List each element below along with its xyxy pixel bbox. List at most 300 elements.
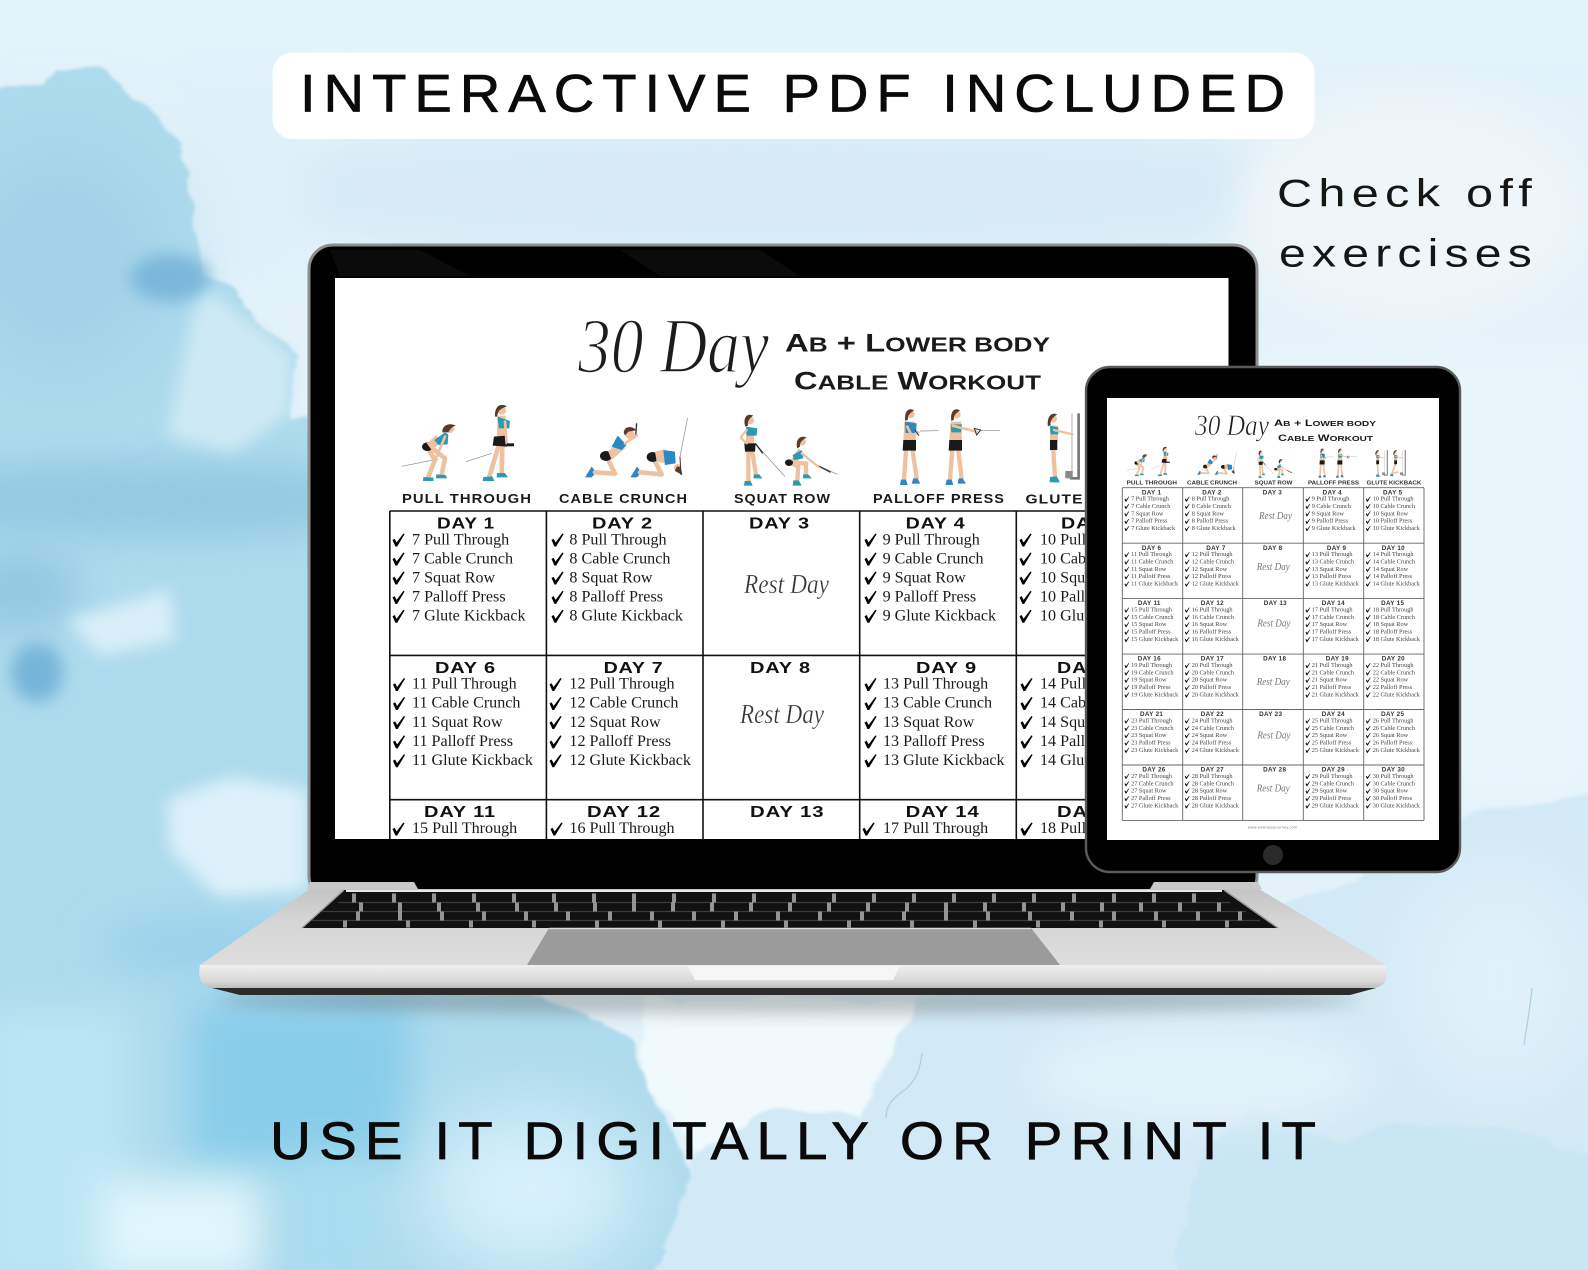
heading pill: interactive PDF included: INTERACTIVE PDF INCLUDED [300, 64, 1293, 124]
tablet day 20: 22 Glute Kickback [1373, 691, 1421, 698]
tablet day 26: 27 Pull Through [1131, 773, 1173, 780]
tablet day 12: 16 Squat Row [1192, 621, 1228, 628]
tablet day 10 [1366, 545, 1421, 588]
tablet day 25: 26 Glute Kickback [1373, 747, 1421, 754]
tablet day 20: 22 Pull Through [1373, 662, 1414, 669]
tablet day 12: 16 Pull Through [1192, 607, 1233, 614]
tablet day 10: 14 Pull Through [1373, 551, 1414, 558]
tablet day 13 rest: DAY 13 [1264, 600, 1287, 607]
tablet day 25 [1366, 711, 1421, 754]
tablet day 5: 10 Palloff Press [1373, 518, 1413, 525]
tablet day 30: 30 Squat Row [1373, 788, 1409, 795]
tablet day 30: 30 Palloff Press [1373, 795, 1413, 802]
tablet day 7: 12 Pull Through [1192, 551, 1233, 558]
tablet day 10: 14 Palloff Press [1373, 573, 1413, 580]
tablet day 2: 8 Glute Kickback [1192, 525, 1237, 532]
tablet day 1: 7 Pull Through [1131, 496, 1170, 503]
tablet day 9: 13 Cable Crunch [1312, 559, 1355, 566]
tablet day 27: 28 Cable Crunch [1192, 780, 1235, 787]
tablet day 17 [1185, 656, 1240, 698]
day 6: 11 Cable Crunch [412, 695, 520, 712]
tablet day 6: 11 Cable Crunch [1131, 559, 1174, 566]
tablet day 11: 15 Palloff Press [1131, 629, 1171, 636]
tablet day 11: 15 Glute Kickback [1131, 636, 1179, 643]
day 5: DAY 5 [1061, 516, 1121, 532]
tablet day 22: DAY 22 [1201, 711, 1224, 718]
tablet day 9: DAY 9 [1327, 545, 1346, 552]
day 4: 9 Glute Kickback [883, 608, 997, 625]
tablet day 17: DAY 17 [1201, 656, 1224, 663]
tablet day 22: 24 Pull Through [1192, 718, 1233, 724]
tablet day 27: 28 Palloff Press [1192, 795, 1232, 802]
tablet day 5: 10 Cable Crunch [1373, 503, 1416, 510]
tablet day 8 rest [1256, 545, 1290, 573]
tablet day 14: 17 Pull Through [1312, 607, 1353, 614]
tablet day 16 [1124, 656, 1179, 698]
tablet day 4: 9 Pull Through [1312, 496, 1350, 503]
day 5: 10 Squat Row [1040, 569, 1132, 586]
tablet day 25: 26 Pull Through [1373, 718, 1414, 724]
day 1: 7 Palloff Press [412, 589, 506, 606]
keyboard [302, 890, 1278, 928]
tablet day 25: 26 Palloff Press [1373, 740, 1413, 746]
day 4: 9 Palloff Press [883, 589, 976, 606]
tablet day 7: 12 Squat Row [1192, 566, 1228, 573]
day 2 [552, 516, 684, 625]
tablet body [1086, 367, 1460, 872]
day 6: 11 Glute Kickback [412, 752, 534, 769]
tablet day 10: 14 Squat Row [1373, 566, 1409, 573]
tablet day 14: 17 Glute Kickback [1312, 636, 1360, 643]
laptop mockup [199, 245, 1387, 995]
day 13: DAY 13 [750, 804, 824, 821]
tablet day 22 [1185, 711, 1240, 754]
tablet day 21: 23 Glute Kickback [1131, 747, 1179, 754]
tablet day 30: 30 Cable Crunch [1373, 780, 1416, 787]
tablet day 4 [1305, 489, 1357, 532]
tablet day 10: 14 Glute Kickback [1373, 581, 1421, 588]
day 15 [1020, 806, 1085, 836]
tablet day 19: 21 Pull Through [1312, 662, 1353, 669]
tablet day 21: 23 Pull Through [1131, 718, 1173, 724]
tablet day 6: 11 Palloff Press [1131, 573, 1171, 580]
tablet day 16: DAY 16 [1138, 656, 1161, 663]
tablet day 18 rest: DAY 18 [1263, 656, 1286, 663]
tablet day 15: 18 Palloff Press [1373, 629, 1413, 636]
day 12: DAY 12 [587, 804, 661, 821]
tablet day 1 [1124, 489, 1176, 532]
day 12: 16 Pull Through [569, 820, 675, 837]
tablet day 28 rest: DAY 28 [1263, 767, 1286, 774]
day 4: DAY 4 [906, 516, 966, 532]
tablet day 30: DAY 30 [1382, 767, 1405, 774]
tablet day 11: 15 Pull Through [1131, 607, 1173, 614]
tablet day 22: 24 Squat Row [1192, 732, 1228, 739]
figure: pull through [402, 405, 514, 481]
tablet day 15: 18 Pull Through [1373, 607, 1414, 614]
figure: squat row [741, 415, 837, 486]
tablet day 20: DAY 20 [1382, 656, 1405, 663]
day 2: 8 Palloff Press [569, 589, 663, 606]
day 10: DAY 10 [1057, 660, 1129, 677]
tablet day 8 rest: DAY 8 [1263, 545, 1283, 552]
day 4: 9 Pull Through [883, 531, 980, 548]
day 4 [864, 516, 997, 625]
tablet exercise figures [1127, 447, 1405, 478]
day 3 rest: Rest Day [743, 569, 829, 599]
tablet worksheet title: C ABLE W ORKOUT [1278, 433, 1373, 444]
day 8 rest: DAY 8 [750, 660, 811, 677]
tablet exercise labels: CABLE CRUNCH [1187, 480, 1237, 486]
tablet day 21: DAY 21 [1140, 711, 1163, 718]
tablet day 29: 29 Squat Row [1312, 788, 1348, 795]
day 3 rest: DAY 3 [749, 516, 810, 532]
tablet day 17: 20 Glute Kickback [1192, 691, 1240, 698]
laptop base [199, 882, 1387, 995]
tablet day 21: 23 Palloff Press [1131, 740, 1171, 746]
day 5 [1020, 518, 1085, 623]
day 4: 9 Squat Row [883, 569, 966, 586]
day 1: 7 Glute Kickback [412, 608, 526, 625]
tablet day 4: 9 Cable Crunch [1312, 503, 1352, 510]
day 6: 11 Squat Row [412, 714, 503, 731]
tablet day 16: 19 Glute Kickback [1131, 691, 1179, 698]
tablet day 19 [1305, 656, 1360, 698]
tablet day 1: DAY 1 [1142, 489, 1161, 496]
exercise labels: GLUTE KICKBACK [1026, 492, 1180, 506]
tablet footer url: www.wellnessjourney.com [1248, 826, 1297, 830]
day 1: 7 Pull Through [412, 531, 509, 548]
day 7: 12 Squat Row [569, 714, 661, 731]
tablet day 20: 22 Cable Crunch [1373, 669, 1416, 676]
tablet exercise labels: PULL THROUGH [1127, 480, 1177, 486]
tablet day 29: 29 Pull Through [1312, 773, 1353, 780]
tablet day 5 [1366, 489, 1421, 532]
tablet day 16: 19 Pull Through [1131, 662, 1173, 669]
tablet day 27: 28 Pull Through [1192, 773, 1233, 780]
tablet day 27: DAY 27 [1201, 767, 1224, 774]
tablet exercise labels: SQUAT ROW [1255, 480, 1293, 486]
tablet day 14: 17 Squat Row [1312, 621, 1348, 628]
tablet day 29: DAY 29 [1322, 767, 1345, 774]
tablet day 15: 18 Squat Row [1373, 621, 1409, 628]
tablet day 27 [1185, 767, 1240, 809]
tablet day 3 rest: DAY 3 [1263, 489, 1282, 496]
tablet day 4: 9 Palloff Press [1312, 518, 1349, 525]
tablet day 13 rest [1257, 600, 1290, 630]
tablet day 16: 19 Palloff Press [1131, 684, 1171, 691]
tablet day 10: DAY 10 [1382, 545, 1405, 552]
worksheet title [578, 320, 1050, 390]
day 15: DAY 15 [1057, 804, 1131, 821]
tablet day 25: 26 Cable Crunch [1373, 725, 1416, 732]
tablet day 16: 19 Squat Row [1131, 677, 1167, 684]
tablet day 5: 10 Squat Row [1373, 510, 1409, 517]
day 9: 13 Squat Row [883, 714, 975, 731]
tablet day 29: 29 Palloff Press [1312, 795, 1352, 802]
tablet day 2: DAY 2 [1202, 489, 1222, 496]
tablet day 11 [1124, 600, 1179, 643]
tablet day 27: 28 Squat Row [1192, 788, 1228, 795]
day 5: 10 Palloff Press [1040, 589, 1142, 606]
tablet day 22: 24 Glute Kickback [1192, 747, 1240, 754]
tablet day 30: 30 Glute Kickback [1373, 802, 1421, 809]
tablet day 6: 11 Squat Row [1131, 566, 1167, 573]
tablet day 12: 16 Glute Kickback [1192, 636, 1240, 643]
day 10: 14 Cable Crunch [1040, 695, 1149, 712]
day 9: 13 Pull Through [883, 676, 988, 693]
tablet exercise labels: GLUTE KICKBACK [1367, 480, 1421, 486]
tablet day 2: 8 Cable Crunch [1192, 503, 1232, 510]
tablet day 14: 17 Cable Crunch [1312, 614, 1355, 621]
worksheet title: 30 Day [577, 302, 769, 389]
day 1 [392, 516, 526, 625]
tablet day 22: 24 Cable Crunch [1192, 725, 1235, 732]
day 6: 11 Palloff Press [412, 733, 513, 750]
day 6: DAY 6 [435, 660, 496, 677]
tablet day 23 rest: DAY 23 [1259, 711, 1282, 718]
day 10: 14 Palloff Press [1040, 733, 1142, 750]
day 10: 14 Glute Kickback [1040, 752, 1163, 769]
tablet day 15: DAY 15 [1381, 600, 1404, 607]
tablet day 26: 27 Glute Kickback [1131, 802, 1179, 809]
day 3 rest [743, 516, 829, 599]
day 7: 12 Cable Crunch [569, 695, 678, 712]
tablet day 24 [1305, 711, 1360, 754]
worksheet title: C ABLE W ORKOUT [794, 368, 1041, 396]
tablet day 25: 26 Squat Row [1373, 732, 1409, 739]
tablet day 2: 8 Palloff Press [1192, 518, 1229, 525]
tablet day 9: 13 Glute Kickback [1312, 581, 1360, 588]
tablet day 7: 12 Palloff Press [1192, 573, 1232, 580]
tablet day 6: 11 Pull Through [1131, 551, 1173, 558]
tablet day 11: DAY 11 [1138, 600, 1161, 607]
tablet day 30 [1366, 767, 1421, 809]
tablet day 24: 25 Cable Crunch [1312, 725, 1355, 732]
tablet day 12: 16 Cable Crunch [1192, 614, 1235, 621]
tablet day 7: DAY 7 [1206, 545, 1226, 552]
tablet day 19: 21 Palloff Press [1312, 684, 1352, 691]
tablet day 28 rest [1256, 767, 1290, 795]
tablet day 7: 12 Cable Crunch [1192, 559, 1235, 566]
tablet day 19: 21 Squat Row [1312, 677, 1348, 684]
tablet day 1: 7 Palloff Press [1131, 518, 1168, 525]
tablet day 13 rest: Rest Day [1257, 618, 1290, 630]
tablet day 29: 29 Glute Kickback [1312, 802, 1360, 809]
day 5: 10 Cable Crunch [1040, 550, 1149, 567]
day 2: 8 Cable Crunch [569, 550, 670, 567]
tablet day 26: 27 Squat Row [1131, 788, 1167, 795]
tablet mockup [1086, 367, 1460, 872]
tablet day 28 rest: Rest Day [1256, 783, 1290, 795]
tablet day 18 rest [1256, 656, 1290, 688]
tablet day 2 [1185, 489, 1237, 532]
tablet day 5: 10 Glute Kickback [1373, 525, 1421, 532]
exercise labels: CABLE CRUNCH [559, 492, 688, 506]
tablet day 22: 24 Palloff Press [1192, 740, 1232, 746]
tablet day 24: 25 Squat Row [1312, 732, 1348, 739]
tablet day 7 [1185, 545, 1240, 588]
tablet day 26: DAY 26 [1142, 767, 1166, 774]
tablet day 12: 16 Palloff Press [1192, 629, 1232, 636]
tablet day 24: 25 Palloff Press [1312, 740, 1352, 746]
tablet day 23 rest: Rest Day [1257, 730, 1290, 742]
tablet day 3 rest [1258, 489, 1292, 522]
day 9 [864, 660, 1006, 769]
day 7: 12 Glute Kickback [569, 752, 692, 769]
tablet day 17: 20 Cable Crunch [1192, 669, 1235, 676]
tablet day 21: 23 Cable Crunch [1131, 725, 1174, 732]
tablet day 19: 21 Glute Kickback [1312, 691, 1360, 698]
figure: glute kickback [1048, 413, 1125, 482]
tablet day 26: 27 Palloff Press [1131, 795, 1171, 802]
tablet day 9: 13 Palloff Press [1312, 573, 1352, 580]
day 14: DAY 14 [906, 804, 980, 821]
tablet day 24: 25 Pull Through [1312, 718, 1353, 724]
day 11: DAY 11 [424, 804, 496, 821]
laptop shadow [220, 986, 1360, 1014]
tablet day 17: 20 Palloff Press [1192, 684, 1232, 691]
figure: palloff press [900, 409, 1000, 485]
worksheet title: A B + L OWER BODY [785, 330, 1051, 358]
heading pill: interactive PDF included [272, 52, 1314, 139]
callout: check off exercises [1277, 172, 1538, 276]
tablet worksheet title: A B + L OWER BODY [1274, 418, 1376, 429]
tablet day 9 [1305, 545, 1360, 588]
day 7: 12 Pull Through [569, 676, 675, 693]
day 1: 7 Squat Row [412, 569, 496, 586]
tablet calendar grid [1122, 488, 1424, 820]
day 2: DAY 2 [592, 516, 653, 532]
tablet day 1: 7 Glute Kickback [1131, 525, 1176, 532]
tablet day 30: 30 Pull Through [1373, 773, 1414, 780]
tablet day 21 [1124, 711, 1179, 754]
tablet day 17: 20 Pull Through [1192, 662, 1233, 669]
tablet day 11: 15 Cable Crunch [1131, 614, 1174, 621]
tablet day 12: DAY 12 [1201, 600, 1224, 607]
tablet day 23 rest [1257, 711, 1290, 742]
tablet day 19: DAY 19 [1326, 656, 1349, 663]
day 2: 8 Pull Through [569, 531, 667, 548]
tablet day 1: 7 Cable Crunch [1131, 503, 1171, 510]
tablet day 6 [1124, 545, 1179, 588]
laptop lid [309, 245, 1257, 900]
day 14 [862, 806, 988, 836]
day 11 [392, 806, 517, 836]
tablet day 6: 11 Glute Kickback [1131, 581, 1179, 588]
tablet day 26 [1124, 767, 1179, 809]
tablet day 4: 9 Glute Kickback [1312, 525, 1357, 532]
tablet day 16: 19 Cable Crunch [1131, 669, 1174, 676]
tablet day 4: 9 Squat Row [1312, 510, 1344, 517]
day 8 rest [739, 660, 824, 729]
tablet day 25: DAY 25 [1381, 711, 1404, 718]
day 4: 9 Cable Crunch [883, 550, 984, 567]
tablet day 15: 18 Glute Kickback [1373, 636, 1421, 643]
laptop screen [335, 278, 1228, 839]
tablet day 29 [1305, 767, 1360, 809]
day 14: 17 Pull Through [883, 820, 988, 837]
day 6: 11 Pull Through [412, 676, 517, 693]
tablet day 19: 21 Cable Crunch [1312, 669, 1355, 676]
tablet day 9: 13 Pull Through [1312, 551, 1353, 558]
day 12 [550, 806, 674, 836]
exercise labels: SQUAT ROW [734, 492, 831, 506]
tablet day 15 [1366, 600, 1421, 643]
tablet day 20: 22 Squat Row [1373, 677, 1409, 684]
tablet day 14: DAY 14 [1322, 600, 1345, 607]
tablet day 6: DAY 6 [1142, 545, 1161, 552]
tablet day 26: 27 Cable Crunch [1131, 780, 1174, 787]
tablet day 3 rest: Rest Day [1258, 510, 1292, 522]
tablet day 11: 15 Squat Row [1131, 621, 1167, 628]
tablet day 15: 18 Cable Crunch [1373, 614, 1416, 621]
exercise labels [403, 494, 1082, 506]
tablet day 12 [1185, 600, 1240, 643]
figure: cable crunch [585, 418, 688, 477]
tablet exercise labels: PALLOFF PRESS [1308, 480, 1359, 486]
tablet day 18 rest: Rest Day [1256, 676, 1290, 688]
trackpad [527, 928, 1060, 965]
tablet day 2: 8 Pull Through [1192, 496, 1230, 503]
day 10: 14 Pull Through [1040, 676, 1145, 693]
callout: check off exercises: Check off [1277, 172, 1538, 216]
tablet day 24: 25 Glute Kickback [1312, 747, 1360, 754]
tablet day 14: 17 Palloff Press [1312, 629, 1352, 636]
tablet day 17: 20 Squat Row [1192, 677, 1228, 684]
tablet day 20: 22 Palloff Press [1373, 684, 1413, 691]
tablet home button [1263, 845, 1283, 865]
tablet day 27: 28 Glute Kickback [1192, 802, 1240, 809]
day 15: 18 Pull Through [1040, 820, 1145, 837]
day 7 [550, 660, 692, 769]
day 9: 13 Palloff Press [883, 733, 985, 750]
day 7: DAY 7 [604, 660, 664, 677]
day 10: 14 Squat Row [1040, 714, 1132, 731]
day 5: 10 Pull Through [1040, 531, 1145, 548]
day 9: 13 Cable Crunch [883, 695, 992, 712]
tablet day 1: 7 Squat Row [1131, 510, 1164, 517]
day 2: 8 Squat Row [569, 569, 653, 586]
tablet worksheet title: 30 Day [1194, 409, 1270, 442]
tablet day 7: 12 Glute Kickback [1192, 581, 1240, 588]
tablet day 4: DAY 4 [1323, 489, 1342, 496]
day 6 [393, 660, 534, 769]
day 2: 8 Glute Kickback [569, 608, 684, 625]
day 9: DAY 9 [916, 660, 977, 677]
tablet day 2: 8 Squat Row [1192, 510, 1224, 517]
lid notch [688, 966, 900, 980]
calendar grid [389, 510, 1085, 839]
day 1: DAY 1 [437, 516, 495, 532]
tablet day 5: 10 Pull Through [1373, 496, 1414, 503]
day 9: 13 Glute Kickback [883, 752, 1006, 769]
day 7: 12 Palloff Press [569, 733, 671, 750]
tablet day 24: DAY 24 [1322, 711, 1345, 718]
callout: check off exercises: exercises [1279, 232, 1538, 276]
tablet day 5: DAY 5 [1383, 489, 1403, 496]
tablet day 14 [1305, 600, 1360, 643]
day 11: 15 Pull Through [412, 820, 517, 837]
tablet day 21: 23 Squat Row [1131, 732, 1167, 739]
tablet exercise labels [1127, 480, 1422, 486]
tablet day 29: 29 Cable Crunch [1312, 780, 1355, 787]
day 10 [1020, 662, 1085, 768]
day 8 rest: Rest Day [739, 699, 824, 729]
tablet screen [1107, 398, 1439, 840]
tablet day 10: 14 Cable Crunch [1373, 559, 1416, 566]
day 5: 10 Glute Kickback [1040, 608, 1163, 625]
